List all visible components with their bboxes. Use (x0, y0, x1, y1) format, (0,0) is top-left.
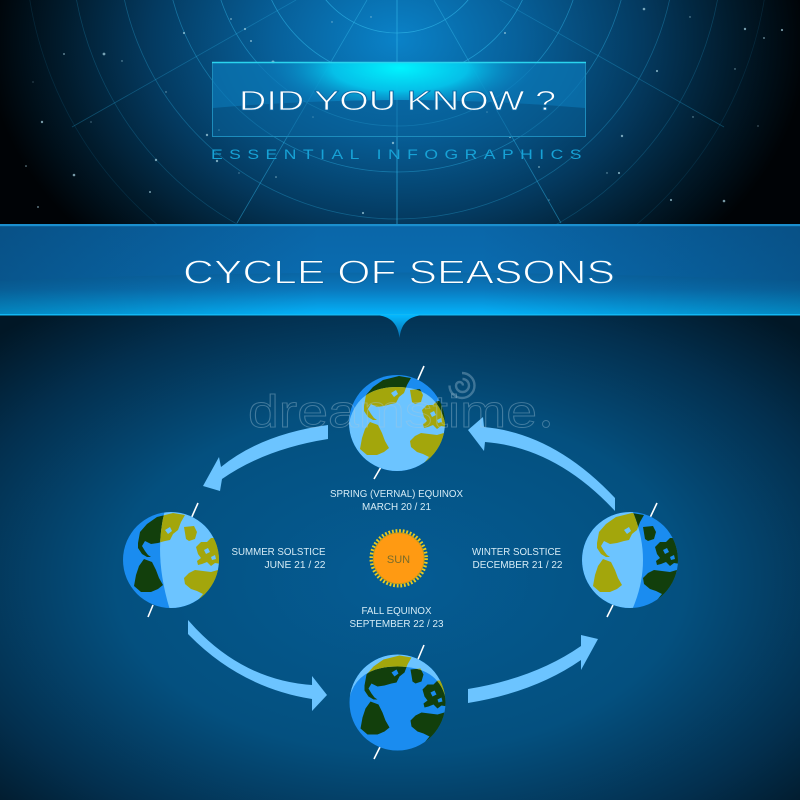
polar grid (25, 0, 769, 312)
arrow: fall to winter (468, 635, 598, 703)
header panel: did you know (0, 0, 800, 224)
sun label: SUN (387, 554, 410, 566)
label: fall equinox (350, 606, 444, 630)
arrow: spring to summer (203, 425, 328, 491)
heading: did you know: DID YOU KNOW ? (239, 85, 556, 116)
subheading: essential infographics: ESSENTIAL INFOGRAPHICS (211, 147, 588, 162)
sun (372, 531, 426, 585)
label: winter solstice: DECEMBER 21 / 22 (472, 560, 563, 571)
globe: fall equinox (350, 645, 448, 759)
label: summer solstice: JUNE 21 / 22 (264, 560, 326, 571)
pointer under banner (375, 315, 424, 338)
label: spring equinox (330, 489, 463, 513)
globe: summer solstice (123, 503, 221, 617)
arrow: summer to fall (188, 620, 327, 711)
globe: winter solstice (582, 503, 680, 617)
label: winter solstice: WINTER SOLSTICE (472, 547, 561, 558)
globe: spring equinox (349, 366, 447, 479)
watermark (248, 373, 550, 437)
banner: cycle of seasons (0, 224, 800, 316)
label: fall equinox: FALL EQUINOX (362, 606, 432, 617)
label: summer solstice: SUMMER SOLSTICE (232, 547, 326, 558)
lower panel background (0, 315, 800, 800)
banner heading: CYCLE OF SEASONS (183, 254, 615, 290)
label: spring equinox: MARCH 20 / 21 (362, 502, 431, 513)
label: fall equinox: SEPTEMBER 22 / 23 (350, 619, 444, 630)
label: spring equinox: SPRING (VERNAL) EQUINOX (330, 489, 463, 500)
arrow: winter to spring (468, 417, 615, 511)
label: winter solstice (472, 547, 563, 571)
title box (212, 62, 586, 136)
label: summer solstice (232, 547, 326, 571)
watermark: dreamstime (248, 386, 537, 437)
stars (25, 8, 783, 214)
